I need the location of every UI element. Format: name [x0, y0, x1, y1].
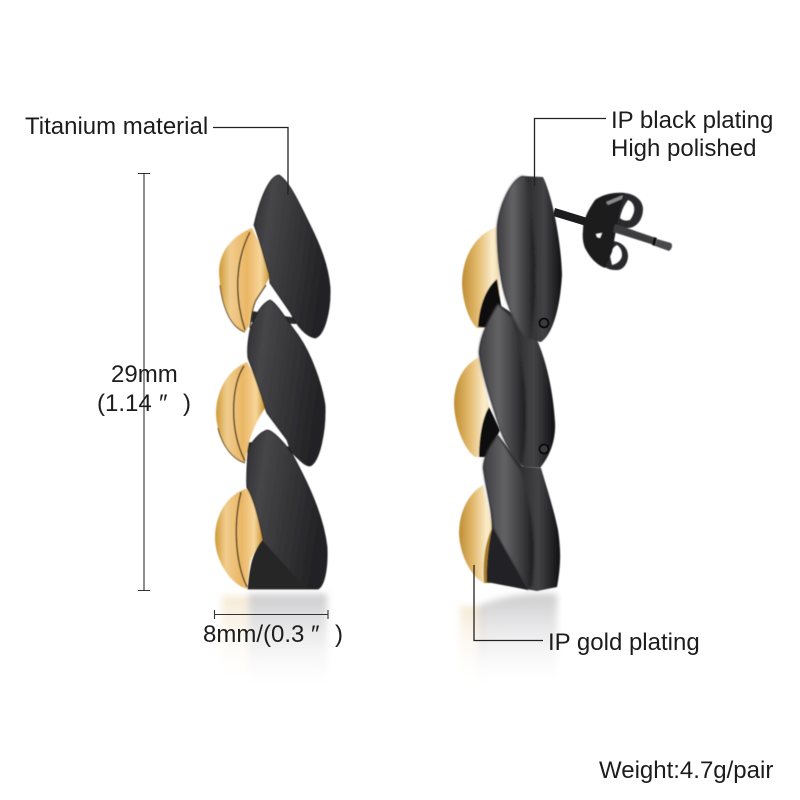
black facet bottom [248, 541, 306, 589]
callout: IP black plating: High polished [611, 135, 756, 162]
hole in body [596, 233, 602, 238]
gold inner shadow bottom [484, 528, 494, 583]
dimension: width 8mm: ) [335, 621, 343, 648]
pin tip [655, 239, 672, 251]
dimension: height 29mm [97, 174, 191, 591]
callout: Titanium material: Titanium material [25, 113, 208, 140]
black leaf bottom [247, 430, 327, 589]
black leaf middle [248, 300, 325, 466]
gold leaf top [219, 228, 270, 332]
pin groove [652, 237, 657, 246]
dimension: height 29mm: ) [183, 390, 191, 417]
black leaf bottom, right earring [483, 435, 560, 591]
callout: IP gold plating: IP gold plating [548, 629, 700, 656]
lit face bottom [483, 435, 534, 590]
dimension: width 8mm: 8mm/(0.3 [203, 621, 304, 648]
dimension: height 29mm: (1.14 [97, 390, 152, 417]
connector link top [251, 311, 297, 324]
lower ring [605, 241, 628, 270]
callout: Titanium material [25, 113, 288, 195]
upper ring [614, 193, 643, 228]
dimension: height 29mm: ″ [159, 390, 168, 417]
callout: IP gold plating [474, 565, 700, 656]
gold leaf middle [216, 362, 265, 463]
lit face top [497, 176, 535, 340]
weight label: Weight:4.7g/pair [599, 757, 773, 784]
dimension: height 29mm: 29mm [111, 361, 178, 388]
gold leaf middle [454, 357, 492, 457]
dimension: width 8mm [203, 610, 343, 648]
gold leaf top [462, 227, 500, 328]
gold leaf bottom [215, 489, 263, 589]
rivet top [540, 318, 548, 328]
rivet middle [540, 444, 548, 454]
right earring [454, 227, 503, 583]
butterfly back [583, 193, 672, 270]
black leaf top, right earring [497, 176, 562, 342]
stud pin [553, 208, 607, 232]
reflection: left earring [222, 594, 327, 694]
gold leaf bottom [459, 485, 494, 583]
body [583, 193, 625, 268]
dark facet bottom [487, 530, 528, 590]
pin shaft [613, 224, 656, 245]
black inner shadow top [478, 279, 503, 328]
black leaf middle, right earring [479, 304, 555, 468]
reflection: right earring [460, 594, 557, 692]
callout: IP black plating [534, 107, 773, 186]
connector link middle [247, 442, 292, 453]
left earring [215, 175, 330, 589]
black inner shadow middle [479, 407, 500, 457]
highlight on body [606, 195, 623, 205]
dimension: width 8mm: ″ [311, 621, 320, 648]
callout: IP black plating: IP black plating [611, 107, 773, 134]
lit face middle [479, 304, 526, 466]
black leaf top [254, 175, 330, 338]
